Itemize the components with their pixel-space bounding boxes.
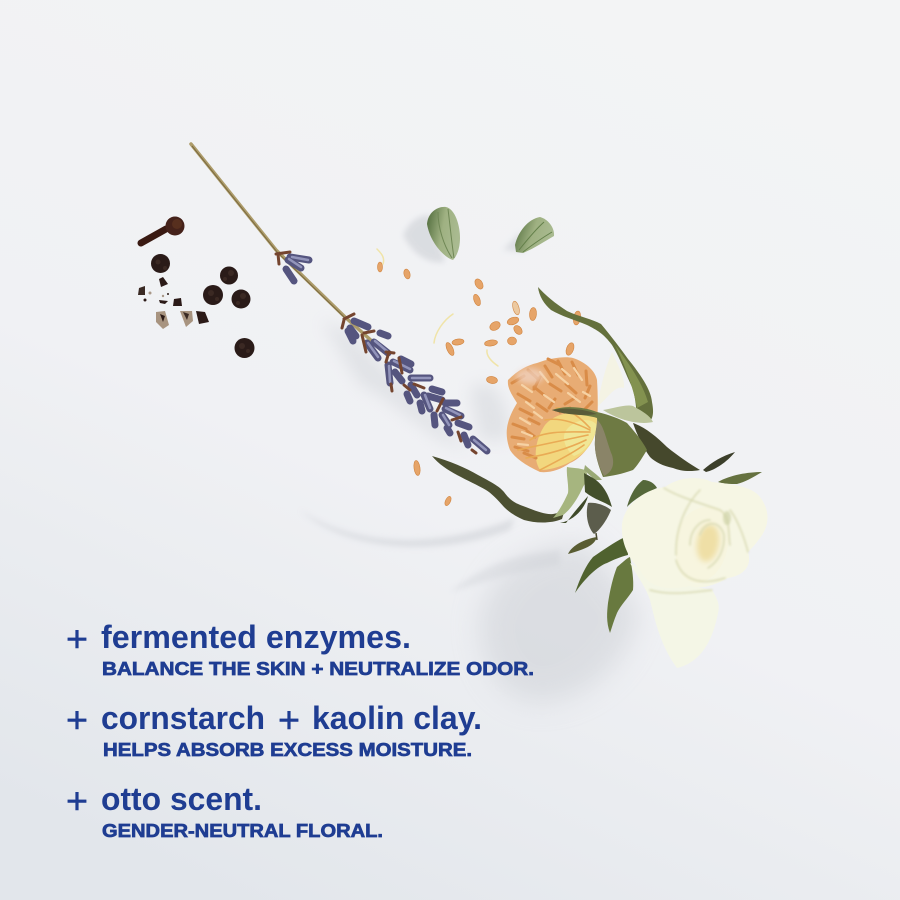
pale threads	[377, 249, 498, 366]
item: cornstarch and kaolin clay: +	[278, 699, 300, 740]
cardamom pods	[427, 207, 554, 260]
item: otto scent: +	[66, 780, 88, 821]
item: otto scent: otto scent.	[101, 781, 262, 817]
safflower bloom	[507, 357, 598, 472]
pale sepal	[603, 405, 653, 423]
pod right	[515, 217, 554, 253]
clove	[141, 216, 184, 243]
orange florets	[512, 359, 592, 458]
lower petal	[630, 563, 719, 668]
yellow stamens	[518, 408, 590, 470]
dark right leaf	[633, 423, 700, 471]
inner petals	[676, 507, 730, 583]
yellow centre	[536, 413, 597, 470]
copy block	[66, 618, 534, 841]
lavender sprig	[191, 144, 487, 453]
flower stem and sepal	[553, 467, 587, 518]
stem	[191, 144, 384, 352]
rose side leaf	[718, 472, 762, 484]
long top leaf	[538, 287, 653, 421]
item: cornstarch and kaolin clay: kaolin clay.	[312, 700, 482, 736]
bottom leaf left	[575, 538, 628, 593]
item: fermented enzymes: fermented enzymes.	[101, 619, 411, 655]
item: cornstarch and kaolin clay: +	[66, 699, 88, 740]
item: cornstarch and kaolin clay: HELPS ABSORB EXCESS MOISTURE.	[103, 740, 472, 760]
clove and peppercorns	[138, 216, 254, 358]
central folded leaf	[552, 407, 647, 477]
peppercorns	[151, 254, 254, 358]
item: otto scent	[66, 780, 383, 841]
dark lower sepals	[584, 473, 612, 507]
item: otto scent: GENDER-NEUTRAL FLORAL.	[102, 821, 383, 841]
pink tip	[516, 368, 544, 384]
small brown leaf	[568, 537, 597, 554]
item: cornstarch and kaolin clay	[66, 699, 482, 760]
item: fermented enzymes	[66, 618, 534, 679]
rose body	[622, 478, 768, 588]
white rose	[622, 478, 768, 668]
item: fermented enzymes: BALANCE THE SKIN + NEUTRALIZE ODOR.	[102, 659, 534, 679]
long left leaf	[432, 456, 565, 522]
pod left	[427, 207, 460, 260]
buds	[286, 257, 487, 451]
cast shadows	[300, 215, 640, 702]
small tip leaf	[703, 452, 735, 472]
white flower petal	[597, 352, 624, 407]
item: cornstarch and kaolin clay: cornstarch	[101, 700, 265, 736]
safflower seeds	[378, 262, 582, 507]
leaves behind flowers	[432, 287, 762, 633]
petal folds	[650, 488, 748, 593]
peppercorn crumbs	[138, 277, 209, 329]
bloom base	[507, 357, 598, 472]
bottom leaf right	[607, 557, 633, 633]
leaf beside rose	[627, 480, 657, 507]
item: fermented enzymes: +	[66, 618, 88, 659]
